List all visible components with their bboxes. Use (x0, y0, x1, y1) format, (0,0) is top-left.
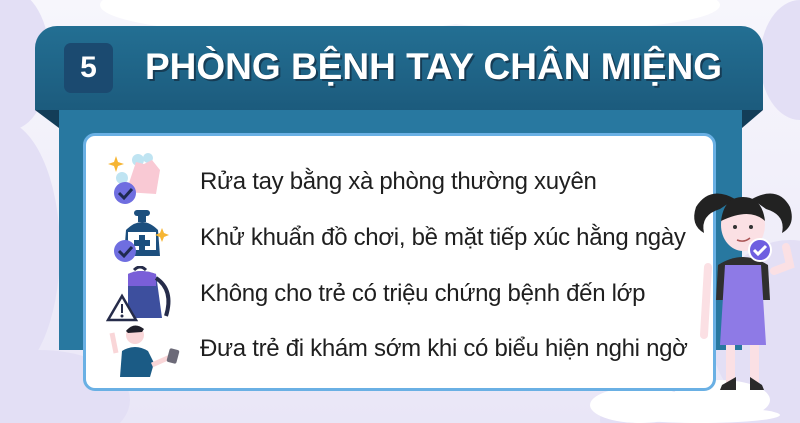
icon: sanitizer (114, 210, 169, 262)
text: row 3: Không cho trẻ có triệu chứng bệnh đến lớp (200, 280, 645, 307)
number badge: 5 (80, 51, 97, 84)
girl character (694, 194, 794, 390)
icon: doctor (110, 326, 180, 377)
blue back panel (59, 105, 742, 350)
header banner (35, 26, 763, 110)
title: PHÒNG BỆNH TAY CHÂN MIỆNG (145, 46, 722, 87)
text: row 1: Rửa tay bằng xà phòng thường xuyên (200, 168, 597, 195)
text: row 2: Khử khuẩn đồ chơi, bề mặt tiếp xúc hằng ngày (200, 224, 686, 251)
fold triangles (35, 110, 763, 128)
text: row 4: Đưa trẻ đi khám sớm khi có biểu hiện nghi ngờ (200, 335, 688, 362)
icon: hand washing (108, 153, 160, 204)
white card (83, 133, 716, 391)
number badge (64, 43, 113, 93)
icon: backpack with warning (106, 266, 170, 322)
